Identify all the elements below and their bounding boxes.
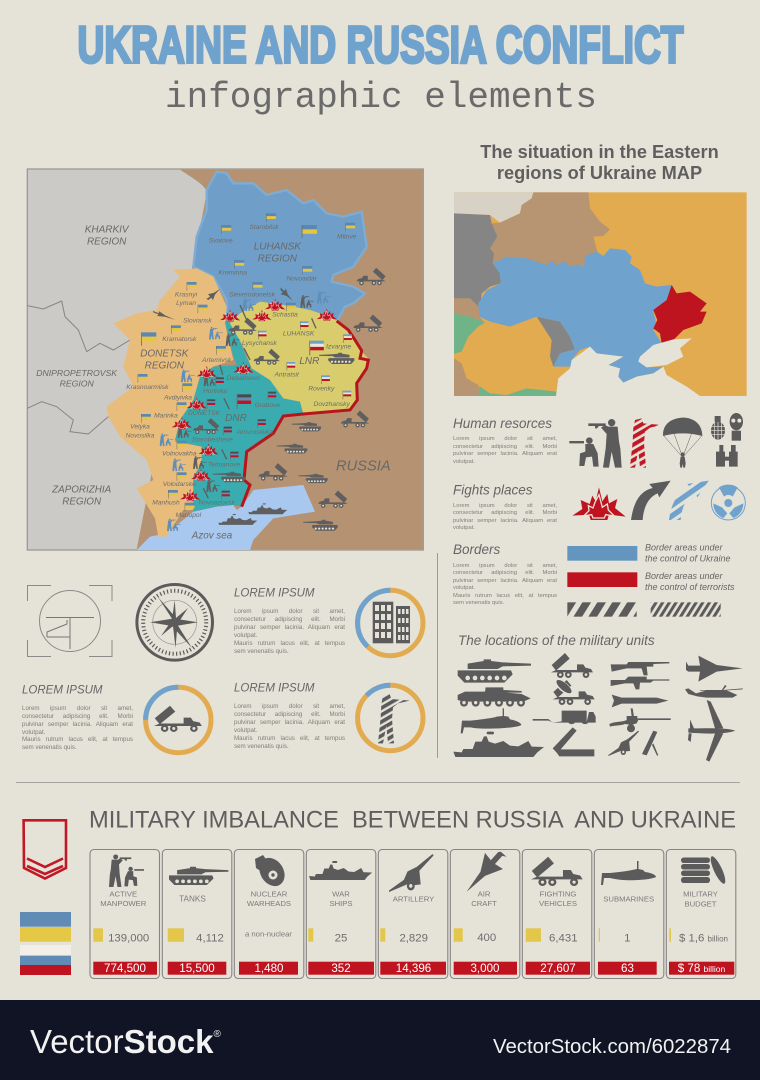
text block: lorem left: Mauris rutrum lacus elit, at tempus xyxy=(22,736,133,743)
city labels: Volodarske xyxy=(163,481,196,488)
text block: human resources: pulvinar semper lacinia. Aliquam erat xyxy=(453,451,557,457)
Ukraine shape xyxy=(478,248,673,383)
border area: Ukraine colour xyxy=(567,546,637,561)
DNR flags xyxy=(207,377,276,499)
icon: launcher xyxy=(531,857,583,886)
red border line xyxy=(242,321,368,507)
card: air craft: AIR xyxy=(478,890,491,899)
card: nuclear warheads: a non-nuclear xyxy=(245,930,292,939)
city labels: Lyman xyxy=(176,300,196,307)
text block: lorem right: sem venenatis quis. xyxy=(234,743,289,750)
flag: Russia xyxy=(20,945,71,975)
text: border legend terrorists: the control of terrorists xyxy=(645,582,735,592)
icon: assault rifle xyxy=(611,662,669,675)
sea xyxy=(556,338,700,396)
text block: lorem left: volutpat. xyxy=(22,729,45,736)
heading: situation in the Eastern regions xyxy=(480,142,719,183)
heading: human resources: Human resorces xyxy=(453,416,552,431)
tanks on map xyxy=(213,353,354,531)
Luhansk region xyxy=(193,172,367,322)
card: air craft: 3,000 xyxy=(470,962,500,975)
icon: fighter jet xyxy=(686,656,743,682)
border pattern: fine hatch xyxy=(651,602,721,617)
heading: situation in the Eastern regions: The situation in the Eastern xyxy=(480,142,719,162)
border area: terrorist colour xyxy=(567,572,637,587)
heading: military imbalance: MILITARY IMBALANCE BETWEEN RUSSIA AND UKRAINE xyxy=(89,808,736,834)
donut: striped soldier xyxy=(358,685,423,751)
text block: lorem left xyxy=(22,705,133,751)
icon: kneeling soldier xyxy=(569,437,599,467)
text block: lorem left: Lorem ipsum dolor sit amet, xyxy=(22,705,133,712)
city labels: Novoazovsk xyxy=(199,499,235,506)
text block: lorem left: pulvinar semper lacinia. Aliquam erat xyxy=(22,721,133,728)
icon: rank chevron badge xyxy=(24,820,66,878)
region labels: REGION xyxy=(258,253,298,264)
icon: radar truck xyxy=(553,677,595,705)
city labels: Sieverodonetsk xyxy=(229,291,276,298)
panel: main map of eastern Ukraine xyxy=(27,169,423,550)
text block: human resources: consectetur adipiscing elit. Morbi xyxy=(453,444,557,450)
icon: strategic bomber xyxy=(688,700,735,762)
city labels: Marinka xyxy=(154,413,178,420)
text block: borders: sem venenatis quis. xyxy=(453,600,504,606)
watermark band xyxy=(0,1000,760,1080)
text block: fights places: volutpat. xyxy=(453,525,475,531)
city labels: Avdiyivka xyxy=(163,394,192,401)
text block: lorem top: pulvinar semper lacinia. Aliquam erat xyxy=(234,624,345,631)
card: air craft: 400 xyxy=(477,932,496,944)
card: tanks: TANKS xyxy=(179,894,206,903)
subtitle: infographic elements xyxy=(165,77,597,118)
region labels: DNIPROPETROVSK xyxy=(36,368,118,378)
text block: lorem top: volutpat. xyxy=(234,632,257,639)
icon: rocket launcher truck xyxy=(551,653,593,678)
border pattern: wide hatch xyxy=(567,602,637,617)
text block: fights places: Lorem ipsum dolor sit amet, xyxy=(453,503,557,509)
icon: nuclear bomb xyxy=(254,853,290,891)
card: submarines: 1 xyxy=(624,933,630,945)
divider: horizontal xyxy=(16,782,740,783)
text block: lorem right xyxy=(234,703,345,750)
card: tanks: 4,112 xyxy=(196,933,224,945)
city labels: Svatove xyxy=(209,237,233,244)
icon: armoured vehicle xyxy=(458,687,531,707)
card: military budget: $ 78 billion xyxy=(678,962,726,975)
city labels: Milove xyxy=(337,233,357,240)
heading: fights places: Fights places xyxy=(453,482,533,498)
icon: machine gun xyxy=(611,677,669,689)
city labels: Grabove xyxy=(255,402,280,409)
icon: parachute xyxy=(663,418,702,468)
city labels: Manhush xyxy=(152,499,180,506)
region labels: REGION xyxy=(145,361,185,372)
card: nuclear warheads: NUCLEAR xyxy=(251,890,288,899)
city labels: Kramatorsk xyxy=(162,336,197,343)
card: fighting vehicles: 6,431 xyxy=(549,933,578,945)
card: fighting vehicles xyxy=(522,850,592,978)
city labels: Antratsit xyxy=(273,372,300,379)
icon: compass xyxy=(137,584,212,660)
card: air craft xyxy=(450,844,520,978)
card: active manpower: 139,000 xyxy=(108,933,149,945)
icon: submarine xyxy=(461,708,521,733)
city labels: Volnovakha xyxy=(162,451,197,458)
text: border legend Ukraine: the control of Ukraine xyxy=(645,554,731,564)
region labels: REGION xyxy=(62,496,102,507)
region labels: RUSSIA xyxy=(336,459,391,475)
icon: towed cannon xyxy=(609,708,671,732)
military unit icons xyxy=(453,653,743,762)
Donetsk region xyxy=(107,268,233,537)
icon: soldiers xyxy=(109,854,144,887)
city labels: Izvaryne xyxy=(326,344,352,351)
icon: jet xyxy=(457,844,511,900)
text block: lorem right: consectetur adipiscing elit. Morbi xyxy=(234,711,345,718)
city labels: Krasnyi xyxy=(175,292,198,299)
city labels: Artemivsk xyxy=(201,357,232,364)
card: war ships xyxy=(306,850,376,978)
city labels: Schastia xyxy=(272,312,298,319)
warships on map xyxy=(218,503,287,525)
city labels: Lysychansk xyxy=(242,340,277,347)
card: submarines: 63 xyxy=(621,962,634,975)
card: military budget: MILITARY xyxy=(683,890,718,899)
city labels: Starobilsk xyxy=(249,224,279,231)
heading: lorem ipsum left: LOREM IPSUM xyxy=(22,684,103,696)
icon: truck with towed gun xyxy=(533,711,596,724)
card: military budget: BUDGET xyxy=(684,900,717,908)
text block: lorem right: volutpat. xyxy=(234,727,257,734)
text block: lorem left: consectetur adipiscing elit. Morbi xyxy=(22,713,133,720)
city labels: Kreminna xyxy=(218,270,247,277)
text block: lorem top: Lorem ipsum dolor sit amet, xyxy=(234,608,345,615)
icon: main battle tank xyxy=(458,659,531,683)
LNR area xyxy=(230,302,368,414)
icon: missile launcher xyxy=(553,727,594,756)
icon: binoculars xyxy=(716,445,738,467)
flag: Ukraine xyxy=(20,912,71,942)
text block: borders: pulvinar semper lacinia. Aliquam erat xyxy=(453,578,557,584)
heading: borders: Borders xyxy=(453,542,501,557)
card: artillery: 14,396 xyxy=(396,962,431,975)
city labels: LUHANSK xyxy=(283,330,315,337)
card: war ships: 352 xyxy=(331,962,351,975)
heading: lorem ipsum right: LOREM IPSUM xyxy=(234,682,315,694)
icon: submarine xyxy=(601,861,656,885)
icon: mortar xyxy=(642,731,658,756)
city labels: Dovzhansky xyxy=(314,401,350,408)
text block: human resources xyxy=(453,436,557,465)
donut: rocket launcher xyxy=(146,687,211,753)
city labels xyxy=(126,224,357,519)
icon: warship xyxy=(453,732,544,757)
city labels: Telmanove xyxy=(208,461,240,468)
city labels: Mariupol xyxy=(176,512,202,519)
explosions on map xyxy=(172,298,337,501)
city labels: Novosilka xyxy=(126,432,155,439)
icon: explosion xyxy=(572,487,626,520)
LNR flags xyxy=(258,321,352,399)
card: military budget xyxy=(666,850,736,978)
panel: locator map of Ukraine xyxy=(454,192,747,396)
text block: lorem left: sem venenatis quis. xyxy=(22,744,77,751)
watermark url: VectorStock.com/6022874 xyxy=(493,1036,731,1058)
card: fighting vehicles: VEHICLES xyxy=(539,899,577,908)
icon: attack arrow xyxy=(631,481,671,520)
heading: lorem ipsum top: LOREM IPSUM xyxy=(234,588,315,600)
city labels: Sloviansk xyxy=(183,318,212,325)
card: war ships: SHIPS xyxy=(329,899,353,908)
card: active manpower: MANPOWER xyxy=(100,899,147,908)
text block: borders xyxy=(453,563,557,606)
text block: human resources: Lorem ipsum dolor sit amet, xyxy=(453,436,557,442)
icon: missile xyxy=(612,695,668,707)
city labels: Novoaidar xyxy=(286,276,318,283)
city labels: Rovenky xyxy=(308,385,335,392)
region labels: Azov sea xyxy=(191,530,233,541)
city labels: DONETSK xyxy=(188,410,221,417)
heading: situation in the Eastern regions: regions of Ukraine MAP xyxy=(497,163,702,183)
text block: borders: consectetur adipiscing elit. Morbi xyxy=(453,570,557,576)
card: war ships: WAR xyxy=(332,890,350,899)
card: artillery: ARTILLERY xyxy=(393,894,434,903)
text block: lorem top: sem venenatis quis. xyxy=(234,648,289,655)
icon: tank xyxy=(169,867,228,885)
card: air craft: CRAFT xyxy=(471,899,497,908)
region labels: LUHANSK xyxy=(254,241,302,252)
city labels: Velyka xyxy=(130,424,150,431)
region labels: ZAPORIZHIA xyxy=(51,484,112,495)
icon: standing soldier xyxy=(588,419,622,468)
icon: striped arrow xyxy=(669,481,709,520)
city labels: Krasnoarmiisk xyxy=(126,384,169,391)
heading: military units: The locations of the military units xyxy=(458,633,655,648)
DNR area xyxy=(175,322,303,512)
text block: fights places xyxy=(453,503,557,531)
icon: radiation xyxy=(711,485,745,520)
city labels: Horlivka xyxy=(203,388,227,395)
city labels: Starobesheve xyxy=(192,436,233,443)
text block: lorem right: Mauris rutrum lacus elit, at tempus xyxy=(234,735,345,742)
region labels: LNR xyxy=(299,356,319,367)
icon: grenade xyxy=(711,416,725,440)
Azov sea xyxy=(137,485,315,550)
card: artillery: 2,829 xyxy=(399,933,428,945)
card: nuclear warheads: WARHEADS xyxy=(247,899,291,908)
icon: striped signalling soldier xyxy=(630,418,662,468)
card: war ships: 25 xyxy=(335,933,347,945)
card: tanks xyxy=(162,850,232,978)
text block: lorem top: consectetur adipiscing elit. Morbi xyxy=(234,616,345,623)
card: nuclear warheads: 1,480 xyxy=(254,962,284,975)
text block: fights places: pulvinar semper lacinia. Aliquam erat xyxy=(453,518,557,524)
icon: gas mask xyxy=(730,413,743,441)
card: submarines xyxy=(594,850,664,978)
separatist soldiers on map xyxy=(178,295,314,492)
donut: buildings xyxy=(358,590,423,656)
card: submarines: SUBMARINES xyxy=(603,894,654,903)
icon: ship xyxy=(309,861,372,880)
card: nuclear warheads xyxy=(234,850,304,978)
text block: fights places: consectetur adipiscing elit. Morbi xyxy=(453,510,557,516)
text block: human resources: volutpat. xyxy=(453,459,475,465)
text block: lorem top: Mauris rutrum lacus elit, at tempus xyxy=(234,640,345,647)
card: artillery xyxy=(378,850,448,978)
section divider: vertical xyxy=(437,553,438,758)
text: border legend Ukraine: Border areas under xyxy=(645,542,724,552)
text: border legend Ukraine xyxy=(645,542,731,564)
Ukrainian flags xyxy=(138,213,355,511)
card: military budget: $ 1,6 billion xyxy=(679,933,728,945)
region labels: REGION xyxy=(87,236,127,247)
legend icons panel xyxy=(453,413,745,762)
watermark logo: VectorStock xyxy=(30,1023,213,1060)
icon: coin stacks xyxy=(681,855,728,885)
card: fighting vehicles: FIGHTING xyxy=(540,890,576,899)
watermark logo: ® xyxy=(213,1029,221,1040)
Ukrainian soldiers on map xyxy=(160,291,331,531)
icon: sniper scope xyxy=(28,586,112,656)
occupied region xyxy=(653,285,707,343)
text block: lorem top xyxy=(234,608,345,655)
region labels: KHARKIV xyxy=(85,224,130,235)
card: tanks: 15,500 xyxy=(179,962,215,975)
region labels: REGION xyxy=(60,379,94,389)
card: active manpower xyxy=(90,850,160,978)
text block: borders: volutpat. xyxy=(453,585,475,591)
icon: howitzer xyxy=(389,854,434,892)
card: fighting vehicles: 27,607 xyxy=(540,962,576,975)
text: border legend terrorists xyxy=(645,571,735,592)
card: active manpower: 774,500 xyxy=(104,962,146,975)
icon: howitzer xyxy=(608,731,639,756)
rocket launchers on map xyxy=(193,268,386,508)
text block: borders: Mauris rutrum lacus elit, at tempus xyxy=(453,593,557,599)
card: active manpower: ACTIVE xyxy=(109,890,137,899)
text: border legend terrorists: Border areas under xyxy=(645,571,724,581)
text block: lorem right: Lorem ipsum dolor sit amet, xyxy=(234,703,345,710)
city labels: Amvrosiivka xyxy=(236,429,273,436)
aircraft on map xyxy=(152,286,316,498)
region labels xyxy=(36,224,391,541)
city labels: Debaltsevo xyxy=(227,375,260,382)
text block: borders: Lorem ipsum dolor sit amet, xyxy=(453,563,557,569)
text block: lorem right: pulvinar semper lacinia. Aliquam erat xyxy=(234,719,345,726)
region labels: DONETSK xyxy=(140,349,190,360)
map base: neighbouring regions xyxy=(27,169,423,550)
icon: helicopter xyxy=(685,685,743,698)
region labels: DNR xyxy=(225,413,247,424)
